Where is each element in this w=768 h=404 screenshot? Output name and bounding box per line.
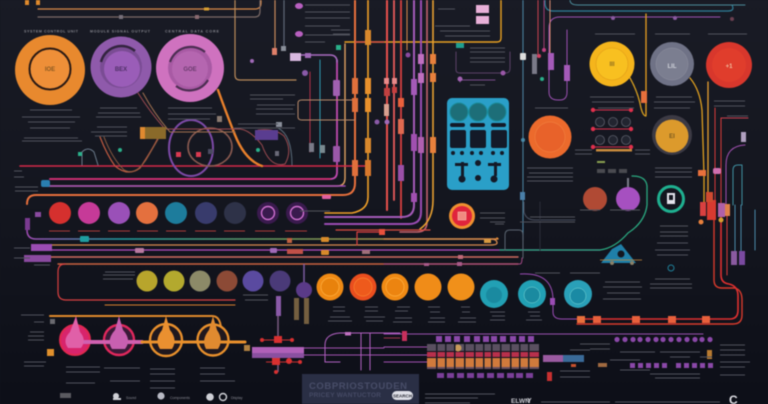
wire tangle xyxy=(78,59,292,176)
button: red stop xyxy=(449,203,475,229)
module top purple keys xyxy=(436,336,534,342)
circle row orange xyxy=(316,274,474,300)
circle: yellow: III xyxy=(609,62,615,68)
circle row teal xyxy=(480,274,592,319)
stem red nodes xyxy=(260,296,309,374)
circle headings: CENTRAL DATA CORE xyxy=(165,30,220,34)
wiring: horizontal rainbow buses xyxy=(27,176,647,305)
circle headings xyxy=(24,30,220,34)
wiring: main vertical trunks xyxy=(20,0,755,250)
circle: red xyxy=(706,42,752,88)
right red cables and tabs xyxy=(577,132,746,324)
circle: pink xyxy=(156,34,224,102)
module lower purple keys xyxy=(437,373,533,378)
circle: gray xyxy=(650,42,694,86)
left funnels xyxy=(47,316,250,356)
circle: orange centre xyxy=(528,116,572,158)
circle row one xyxy=(49,202,308,231)
triangle node xyxy=(600,244,674,271)
circle: purple xyxy=(90,36,152,98)
title box xyxy=(302,374,419,404)
dials xyxy=(450,103,506,121)
connectors column xyxy=(290,3,380,176)
search pill: SEARCH xyxy=(393,394,412,398)
icon legend bottom left: Components xyxy=(170,396,190,400)
circle: pink: GOE xyxy=(183,67,197,73)
circle headings: MODULE SIGNAL OUTPUT xyxy=(90,30,151,34)
circle: yellow xyxy=(590,42,634,86)
icon legend bottom left xyxy=(60,392,243,401)
circle: amber: EI xyxy=(669,134,675,140)
connectors: trunk tabs centre xyxy=(384,52,436,202)
icon legend bottom left: Display xyxy=(231,396,243,400)
purple bus bar xyxy=(252,331,703,370)
dense bottom module xyxy=(427,336,713,381)
circle: red: +1 xyxy=(726,64,733,70)
panel: teal control unit xyxy=(447,98,509,190)
mid right switch array xyxy=(591,108,633,173)
wiring: top left bus lines xyxy=(25,0,296,80)
bottom-right buttons xyxy=(583,178,684,212)
circle row two xyxy=(136,264,312,298)
module stacked rows xyxy=(427,344,584,369)
title box: COBPRIOSTOUDEN xyxy=(309,381,407,392)
title box: PRICEY WANTUCTOR xyxy=(309,392,381,399)
top centre connectors and text xyxy=(456,5,734,200)
circle: orange xyxy=(15,35,85,105)
circle: gray: LIL xyxy=(668,64,677,70)
circle headings: SYSTEM CONTROL UNIT xyxy=(24,30,79,34)
circle: amber xyxy=(652,115,692,155)
circle: purple: BEX xyxy=(115,67,127,73)
circle: orange: IOE xyxy=(45,67,55,73)
connector blocks left xyxy=(24,180,331,262)
icon legend bottom left: Sound xyxy=(126,396,136,400)
corner logo xyxy=(511,393,738,404)
displays xyxy=(450,123,507,182)
right purple keys xyxy=(614,337,713,368)
